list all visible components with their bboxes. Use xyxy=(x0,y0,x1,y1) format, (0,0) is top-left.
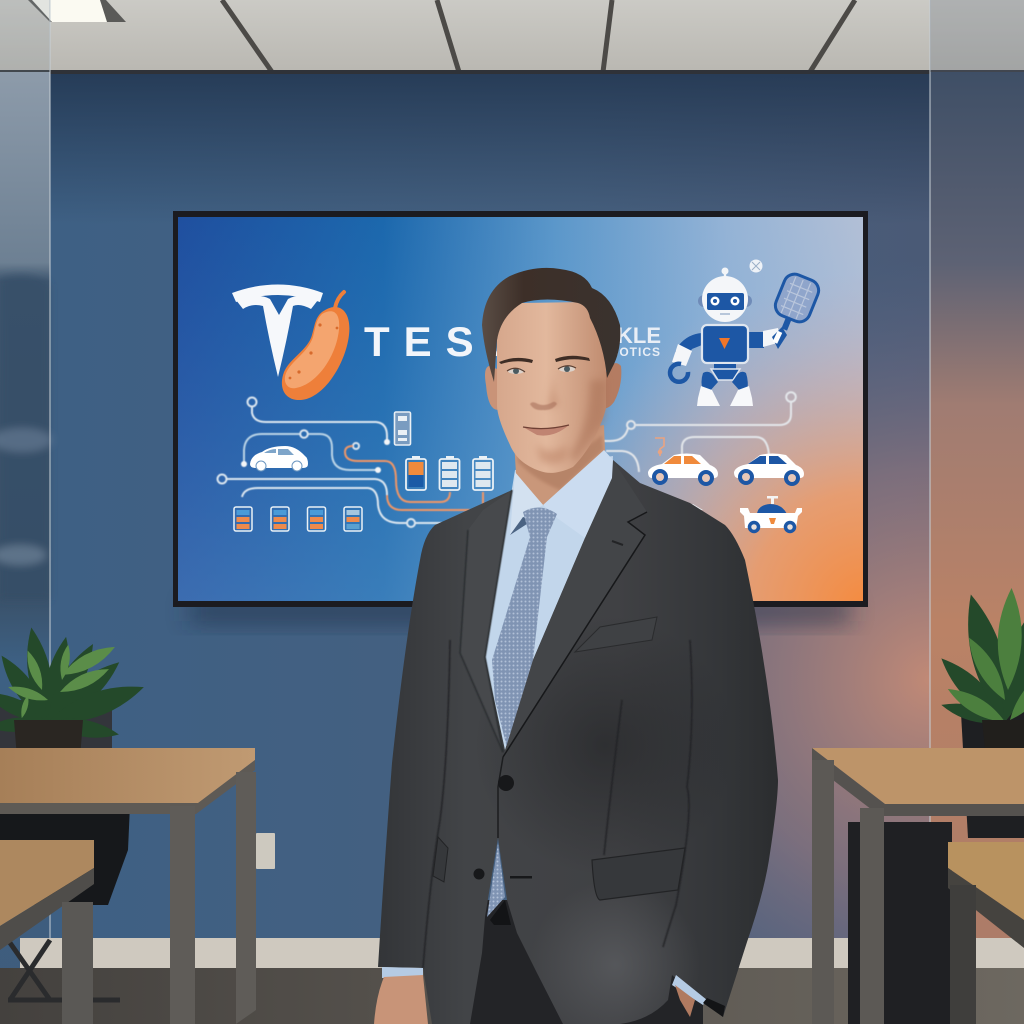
icon: blue car xyxy=(734,454,804,484)
icon: large batteries xyxy=(406,456,493,490)
robot legs and feet xyxy=(697,364,753,406)
icon: pickle xyxy=(282,292,349,400)
neck shadow xyxy=(518,435,603,490)
left flap pocket xyxy=(433,837,448,882)
left hand xyxy=(374,975,428,1024)
robot body xyxy=(702,325,748,363)
wall outlet xyxy=(256,833,275,869)
heading: TESLA logotype: TESLA xyxy=(364,318,572,365)
right glass panel xyxy=(929,0,1024,1024)
neck xyxy=(514,425,605,506)
baseboard and floor xyxy=(0,938,1024,1024)
icon: robot with racket xyxy=(670,260,822,406)
icon: orange car xyxy=(648,454,718,484)
front desk xyxy=(0,840,94,1024)
icon: tesla logo xyxy=(232,284,323,377)
face shading xyxy=(536,372,606,464)
back wall xyxy=(50,74,930,944)
robot ball xyxy=(750,260,762,272)
breast pocket xyxy=(575,617,657,652)
jacket buttons xyxy=(474,775,532,880)
jacket seams xyxy=(423,640,692,968)
heading: pickle robotics logotype xyxy=(580,323,661,359)
sleeve lining xyxy=(703,998,725,1017)
chair back xyxy=(960,695,1024,838)
desk legs xyxy=(812,760,884,1024)
left glass panel xyxy=(0,0,52,1024)
office chair xyxy=(0,700,130,1000)
person xyxy=(374,268,778,1024)
tie xyxy=(492,507,557,748)
icon: partly hidden robot xyxy=(683,504,703,510)
belt xyxy=(490,900,511,925)
front right desk xyxy=(948,842,1024,1024)
shirt collar xyxy=(510,450,613,538)
face xyxy=(497,302,606,473)
tie tip xyxy=(487,843,505,917)
jacket lapels xyxy=(460,460,647,838)
nose xyxy=(530,402,557,410)
shirt xyxy=(485,456,613,750)
heading: pickle robotics logotype: PICKLE xyxy=(580,323,661,348)
icon: small batteries xyxy=(234,507,362,531)
circuit lines: right xyxy=(600,392,796,472)
desk legs xyxy=(170,772,256,1024)
icon: autonomous car xyxy=(740,496,802,532)
cabinet xyxy=(848,822,952,1024)
desk top xyxy=(0,748,255,804)
right plant xyxy=(934,588,1024,772)
side pocket xyxy=(592,848,685,900)
mouth xyxy=(523,425,569,436)
jacket body xyxy=(378,460,778,1024)
plant xyxy=(0,626,148,772)
icon: plug xyxy=(655,438,664,456)
right hand xyxy=(675,985,695,1017)
jacket shading xyxy=(530,672,673,1018)
screen shadow xyxy=(190,600,850,622)
hair xyxy=(482,268,620,382)
right desk and cabinet xyxy=(812,588,1024,1024)
left desk and chair xyxy=(0,626,256,1024)
icon: device panel xyxy=(394,412,410,445)
trousers xyxy=(467,900,703,1024)
ceiling xyxy=(0,0,1024,74)
eyes xyxy=(507,366,576,374)
reflection: clouds and hills xyxy=(0,274,52,600)
robot arms xyxy=(670,327,787,382)
circuit lines: left xyxy=(218,398,483,527)
wall screen xyxy=(173,211,868,622)
shirt cuffs xyxy=(382,967,707,1005)
heading: pickle robotics logotype: ROBOTICS xyxy=(590,345,661,359)
screen background xyxy=(178,217,863,601)
desk top xyxy=(812,748,1024,804)
eyebrows xyxy=(499,356,590,364)
robot racket xyxy=(768,271,822,336)
ears xyxy=(485,363,621,410)
screen bezel xyxy=(173,211,868,607)
robot head xyxy=(698,268,752,322)
icon: white car left xyxy=(250,446,308,471)
